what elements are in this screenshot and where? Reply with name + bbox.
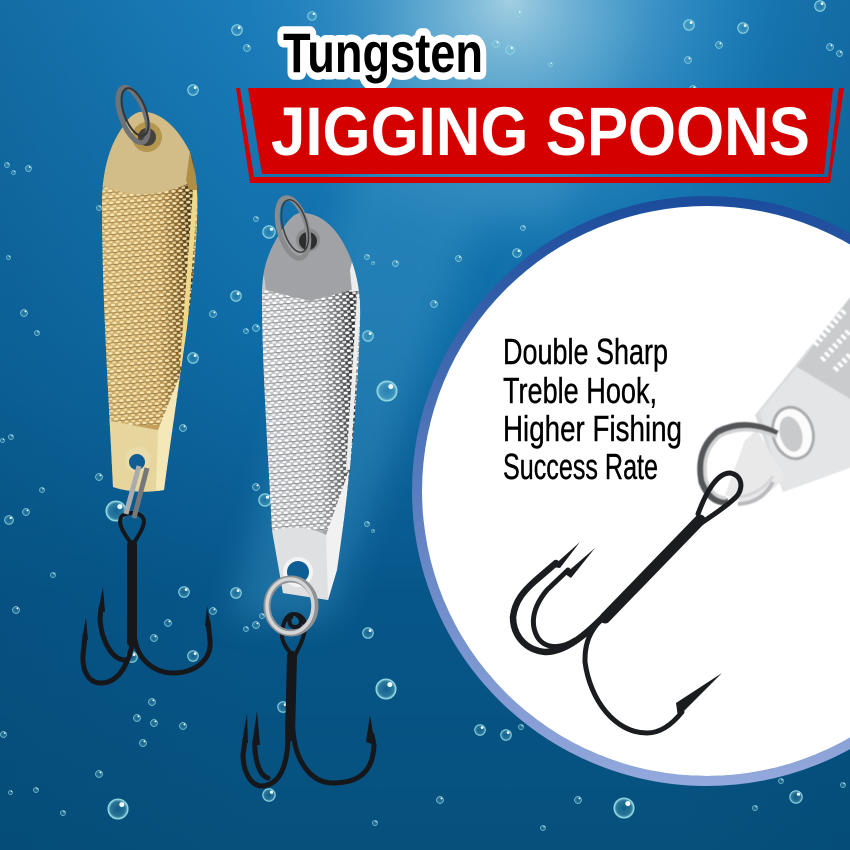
enlarged treble hook [513, 473, 741, 733]
gold spoon body [102, 112, 198, 492]
heading: Tungsten: Tungsten [283, 21, 483, 84]
callout text: Success Rate [503, 446, 658, 487]
gold split ring bottom [126, 466, 147, 518]
silver split ring bottom [267, 579, 315, 633]
enlarged split ring [701, 425, 777, 502]
silver spoon body [262, 213, 360, 600]
gold jigging spoon with treble hook [82, 84, 211, 683]
callout text [503, 331, 682, 487]
enlarged silver spoon tip [725, 295, 850, 505]
callout circle [417, 201, 850, 781]
callout text: Higher Fishing [503, 408, 682, 449]
silver treble hook [242, 614, 375, 786]
callout: enlarged spoon, ring and hook [513, 295, 850, 733]
silver split ring top [271, 194, 315, 262]
silver jigging spoon with treble hook [242, 194, 375, 786]
heading: Tungsten: Tungsten [283, 21, 483, 84]
callout text: Treble Hook, [503, 370, 657, 411]
gold split ring top [112, 84, 154, 146]
callout text: Double Sharp [503, 331, 668, 372]
gold treble hook [82, 513, 211, 683]
